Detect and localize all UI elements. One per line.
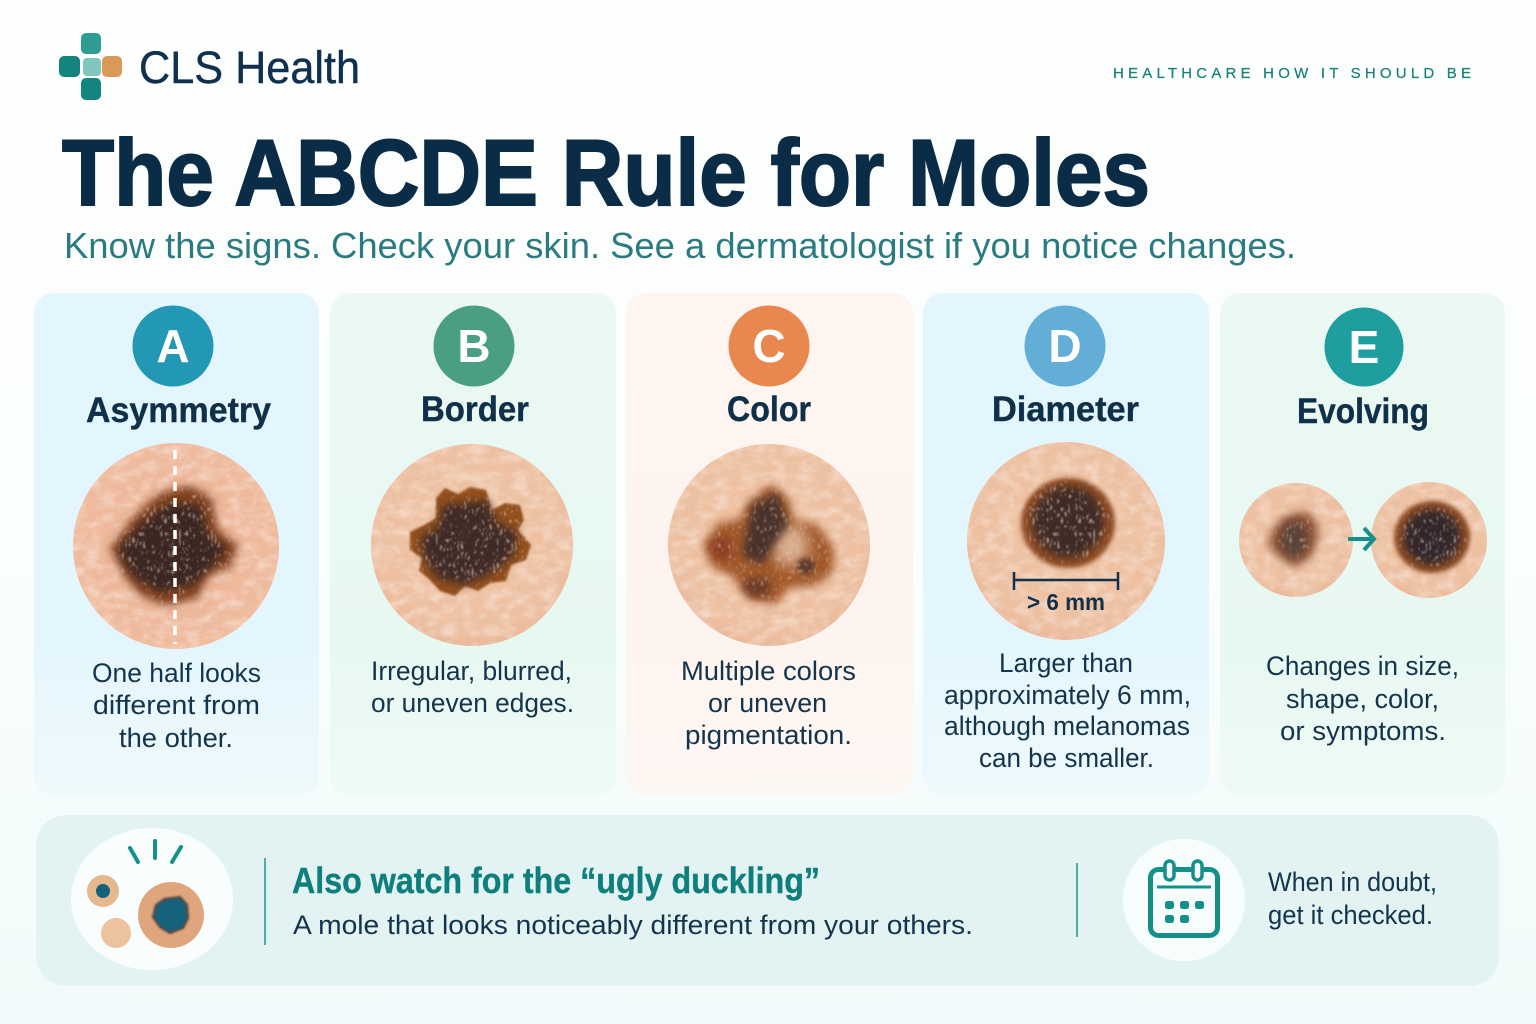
description D: Larger than — [999, 648, 1133, 678]
card background A — [34, 293, 319, 795]
panel: ugly duckling callout — [36, 815, 1499, 986]
reminder text: get it checked. — [1268, 900, 1433, 930]
description A: One half looks — [92, 658, 261, 688]
reminder text: When in doubt, — [1268, 867, 1437, 897]
badge B: B — [457, 320, 491, 372]
icon: calendar — [1123, 839, 1245, 961]
description D — [944, 648, 1191, 773]
heading Asymmetry: Asymmetry — [86, 391, 272, 430]
description D: approximately 6 mm, — [944, 680, 1191, 710]
logo: CLS Health — [59, 33, 360, 100]
size label: > 6 mm — [1027, 589, 1105, 615]
size scale bar — [1014, 572, 1118, 590]
card background D — [923, 293, 1209, 795]
panel: C Color — [626, 293, 913, 795]
card background B — [330, 293, 616, 795]
heading Diameter: Diameter — [992, 390, 1139, 429]
badge C: C — [752, 320, 786, 372]
illustration: irregular border mole — [371, 444, 573, 646]
badge D — [1024, 306, 1106, 386]
badge C — [728, 306, 810, 386]
panel: A Asymmetry — [34, 293, 319, 795]
description A — [92, 658, 261, 753]
logo wordmark: CLS Health — [139, 42, 360, 93]
badge A: A — [156, 320, 190, 372]
divider — [1076, 863, 1078, 937]
divider — [264, 858, 266, 945]
card background E — [1220, 293, 1505, 795]
description B: Irregular, blurred, — [371, 656, 572, 686]
description D: although melanomas — [944, 711, 1190, 741]
heading Evolving: Evolving — [1297, 392, 1429, 431]
badge E — [1324, 308, 1404, 386]
description A: different from — [93, 690, 260, 720]
card background C — [626, 293, 913, 795]
panel: B Border — [330, 293, 616, 795]
illustration: mole with size scale — [967, 442, 1165, 640]
description C — [681, 656, 856, 750]
callout heading: Also watch for the “ugly duckling” — [292, 860, 820, 901]
panel: E Evolving — [1220, 293, 1505, 795]
heading Border: Border — [421, 390, 529, 429]
badge D: D — [1048, 320, 1082, 372]
reminder text — [1268, 867, 1437, 930]
illustration: asymmetric mole — [73, 443, 279, 649]
arrow — [1348, 528, 1374, 550]
panel: D Diameter — [923, 293, 1209, 795]
description B: or uneven edges. — [371, 688, 574, 718]
icon: ugly duckling moles — [71, 828, 233, 970]
title: The ABCDE Rule for Moles — [62, 120, 1150, 225]
description A: the other. — [119, 723, 233, 753]
illustration: multicolored mole — [668, 444, 870, 646]
description E: shape, color, — [1286, 684, 1439, 714]
badge A — [132, 306, 214, 386]
description C: Multiple colors — [681, 656, 856, 686]
badge B — [434, 306, 514, 386]
description E — [1266, 651, 1459, 746]
illustration: small mole growing larger — [1239, 482, 1487, 598]
heading Color: Color — [727, 390, 811, 429]
callout text: A mole that looks noticeably different from your others. — [293, 910, 973, 940]
icon: cross logo — [59, 33, 122, 100]
subtitle: Know the signs. Check your skin. See a dermatologist if you notice changes. — [64, 225, 1296, 266]
description C: pigmentation. — [685, 720, 852, 750]
tagline: HEALTHCARE HOW IT SHOULD BE — [1113, 65, 1471, 82]
description E: Changes in size, — [1266, 651, 1459, 681]
description D: can be smaller. — [979, 743, 1154, 773]
description E: or symptoms. — [1280, 716, 1446, 746]
badge E: E — [1349, 321, 1379, 373]
description B — [371, 656, 574, 718]
callout background — [36, 815, 1499, 986]
description C: or uneven — [708, 688, 827, 718]
